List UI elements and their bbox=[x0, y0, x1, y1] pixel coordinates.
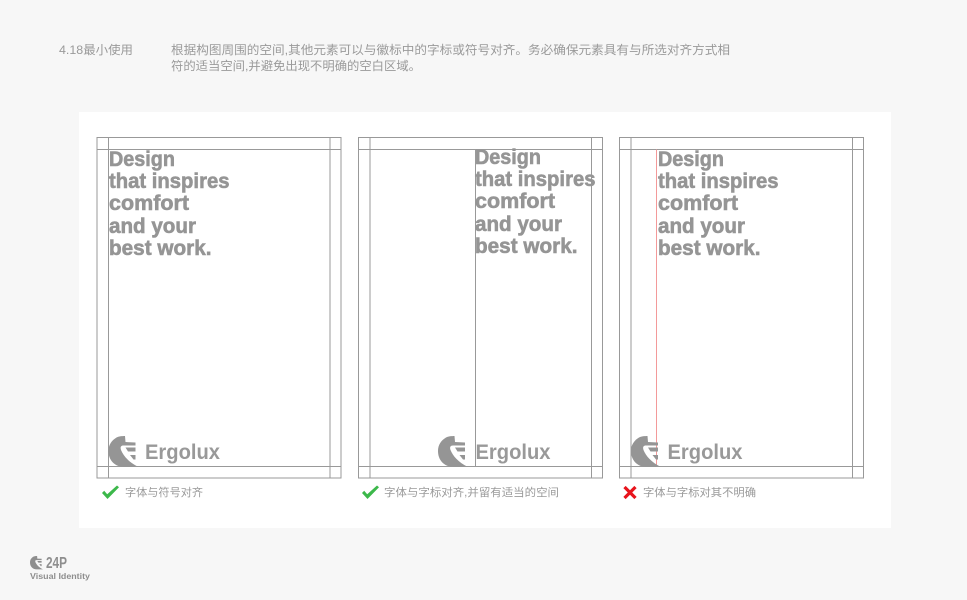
description text: 符的适当空间,并避免出现不明确的空白区域。 bbox=[171, 58, 421, 73]
headline 3 bbox=[658, 147, 779, 260]
headline 3: best work. bbox=[658, 236, 760, 260]
headline 1: Design bbox=[109, 147, 175, 171]
layout grid 2 bbox=[358, 138, 602, 478]
headline 1 bbox=[109, 147, 230, 260]
white content panel bbox=[79, 112, 891, 528]
headline 3: that inspires bbox=[658, 169, 779, 193]
headline 2: best work. bbox=[475, 234, 578, 258]
logo 1 bbox=[108, 436, 220, 467]
caption 1: 字体与符号对齐 bbox=[125, 485, 203, 499]
layout grid 1 bbox=[97, 138, 341, 478]
headline 3: comfort bbox=[658, 191, 738, 215]
headline 1: comfort bbox=[109, 191, 189, 215]
cross mark bbox=[624, 487, 636, 498]
footer label: Visual Identity bbox=[30, 571, 90, 581]
layout grid 3 bbox=[620, 138, 864, 478]
headline 2: Design bbox=[475, 145, 541, 169]
example 1: aligned to symbol bbox=[97, 138, 341, 499]
page count: 24P bbox=[46, 555, 67, 572]
logo 2 bbox=[438, 436, 551, 467]
description text: 根据构图周围的空间,其他元素可以与徽标中的字标或符号对齐。务必确保元素具有与所选对齐方式相 bbox=[171, 42, 730, 57]
logo 3: Ergolux bbox=[668, 440, 743, 464]
red alignment line bbox=[656, 150, 658, 466]
headline 1: and your bbox=[109, 214, 197, 238]
section number: 4.18最小使用 bbox=[59, 42, 133, 57]
logo 2: Ergolux bbox=[476, 440, 551, 464]
headline 1: best work. bbox=[109, 236, 212, 260]
headline 3: and your bbox=[658, 214, 746, 238]
footer brand mark bbox=[30, 555, 90, 581]
example 3: unclear alignment bbox=[620, 138, 864, 499]
example 2: aligned to wordmark bbox=[358, 138, 602, 499]
caption 3: 字体与字标对其不明确 bbox=[643, 485, 756, 499]
check mark 1 bbox=[102, 486, 119, 499]
caption 2: 字体与字标对齐,并留有适当的空间 bbox=[384, 485, 559, 499]
headline 2: that inspires bbox=[475, 167, 596, 191]
headline 2 bbox=[475, 145, 596, 258]
footer icon bbox=[30, 556, 43, 569]
description text bbox=[171, 42, 730, 73]
logo 3 bbox=[631, 436, 743, 467]
check mark 2 bbox=[362, 486, 379, 499]
headline 3: Design bbox=[658, 147, 724, 171]
headline 1: that inspires bbox=[109, 169, 230, 193]
logo 1: Ergolux bbox=[145, 440, 220, 464]
headline 2: comfort bbox=[475, 189, 555, 213]
headline 2: and your bbox=[475, 212, 563, 236]
